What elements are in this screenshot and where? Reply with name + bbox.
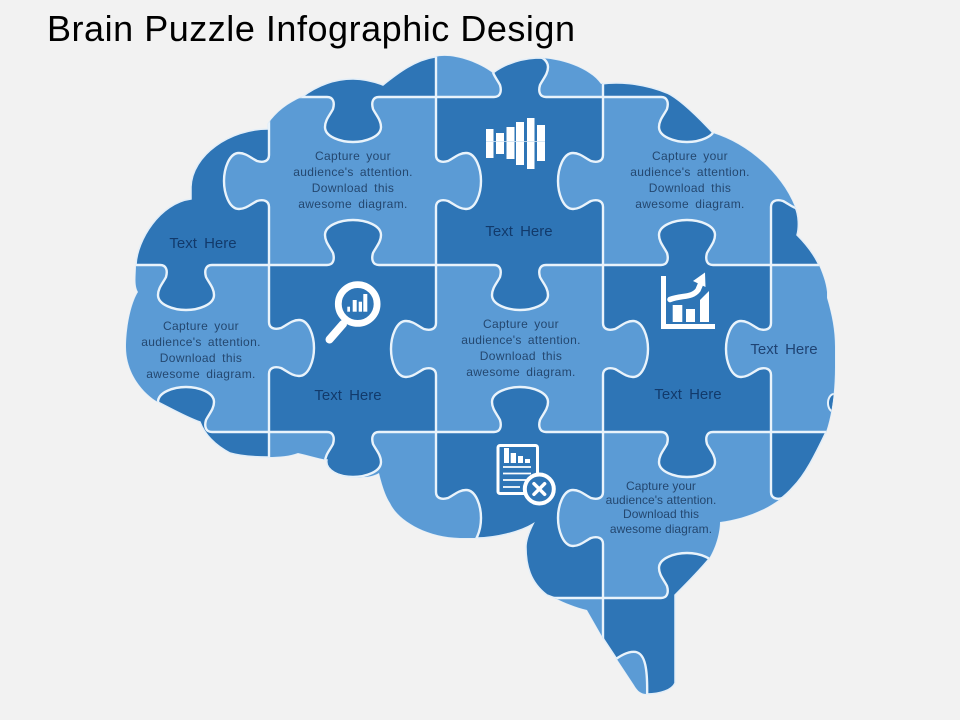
icon: document with chart and cross badge	[498, 446, 554, 504]
icon: equalizer bars	[486, 118, 545, 169]
text: centre piece: Download this	[480, 349, 562, 363]
text: middle left piece: Download this	[160, 351, 242, 365]
text: upper left piece	[293, 149, 413, 211]
label: far right: Text Here	[750, 341, 818, 358]
label: top centre: Text Here	[485, 223, 553, 240]
text: upper left piece: Capture your	[315, 149, 391, 163]
piece: bottom right	[556, 430, 782, 600]
piece: upper left	[224, 97, 481, 265]
notch: small right edge	[827, 393, 834, 412]
text: upper left piece: audience's attention.	[293, 165, 413, 179]
title: Brain Puzzle Infographic Design	[47, 8, 575, 49]
text: upper right piece: audience's attention.	[630, 165, 750, 179]
text: centre piece: audience's attention.	[461, 333, 581, 347]
text: upper right piece: awesome diagram.	[635, 197, 745, 211]
piece: bottom left	[268, 430, 482, 538]
puzzle pieces: light blue	[126, 56, 835, 694]
text: bottom right piece: audience's attention.	[606, 493, 716, 507]
piece: stem left sliver	[554, 596, 604, 639]
piece: middle left	[100, 265, 314, 432]
text: centre piece: Capture your	[483, 317, 559, 331]
label: top left: Text Here	[169, 235, 237, 252]
text: upper right piece: Download this	[649, 181, 731, 195]
label: middle left: Text Here	[314, 387, 382, 404]
text: middle left piece: Capture your	[163, 319, 239, 333]
label: middle right: Text Here	[654, 386, 722, 403]
brain silhouette: dark base	[126, 56, 835, 694]
icon: growth chart with arrow	[661, 272, 715, 329]
text: bottom right piece: awesome diagram.	[610, 522, 712, 536]
text: upper right piece: Capture your	[652, 149, 728, 163]
text: upper left piece: awesome diagram.	[298, 197, 408, 211]
text: middle left piece	[141, 319, 261, 381]
text: upper left piece: Download this	[312, 181, 394, 195]
text: middle left piece: awesome diagram.	[146, 367, 256, 381]
text: bottom right piece: Download this	[623, 507, 699, 521]
text: upper right piece	[630, 149, 750, 211]
text: bottom right piece	[606, 479, 716, 536]
piece: upper right	[558, 97, 816, 265]
icon: magnifying glass with bars	[330, 285, 377, 340]
text: centre piece	[461, 317, 581, 379]
text: bottom right piece: Capture your	[626, 479, 696, 493]
text: middle left piece: audience's attention.	[141, 335, 261, 349]
piece: stem bottom tab	[616, 650, 648, 694]
piece: top centre	[434, 56, 604, 98]
piece: middle right	[724, 264, 835, 434]
piece: centre	[391, 265, 648, 432]
text: centre piece: awesome diagram.	[466, 365, 576, 379]
